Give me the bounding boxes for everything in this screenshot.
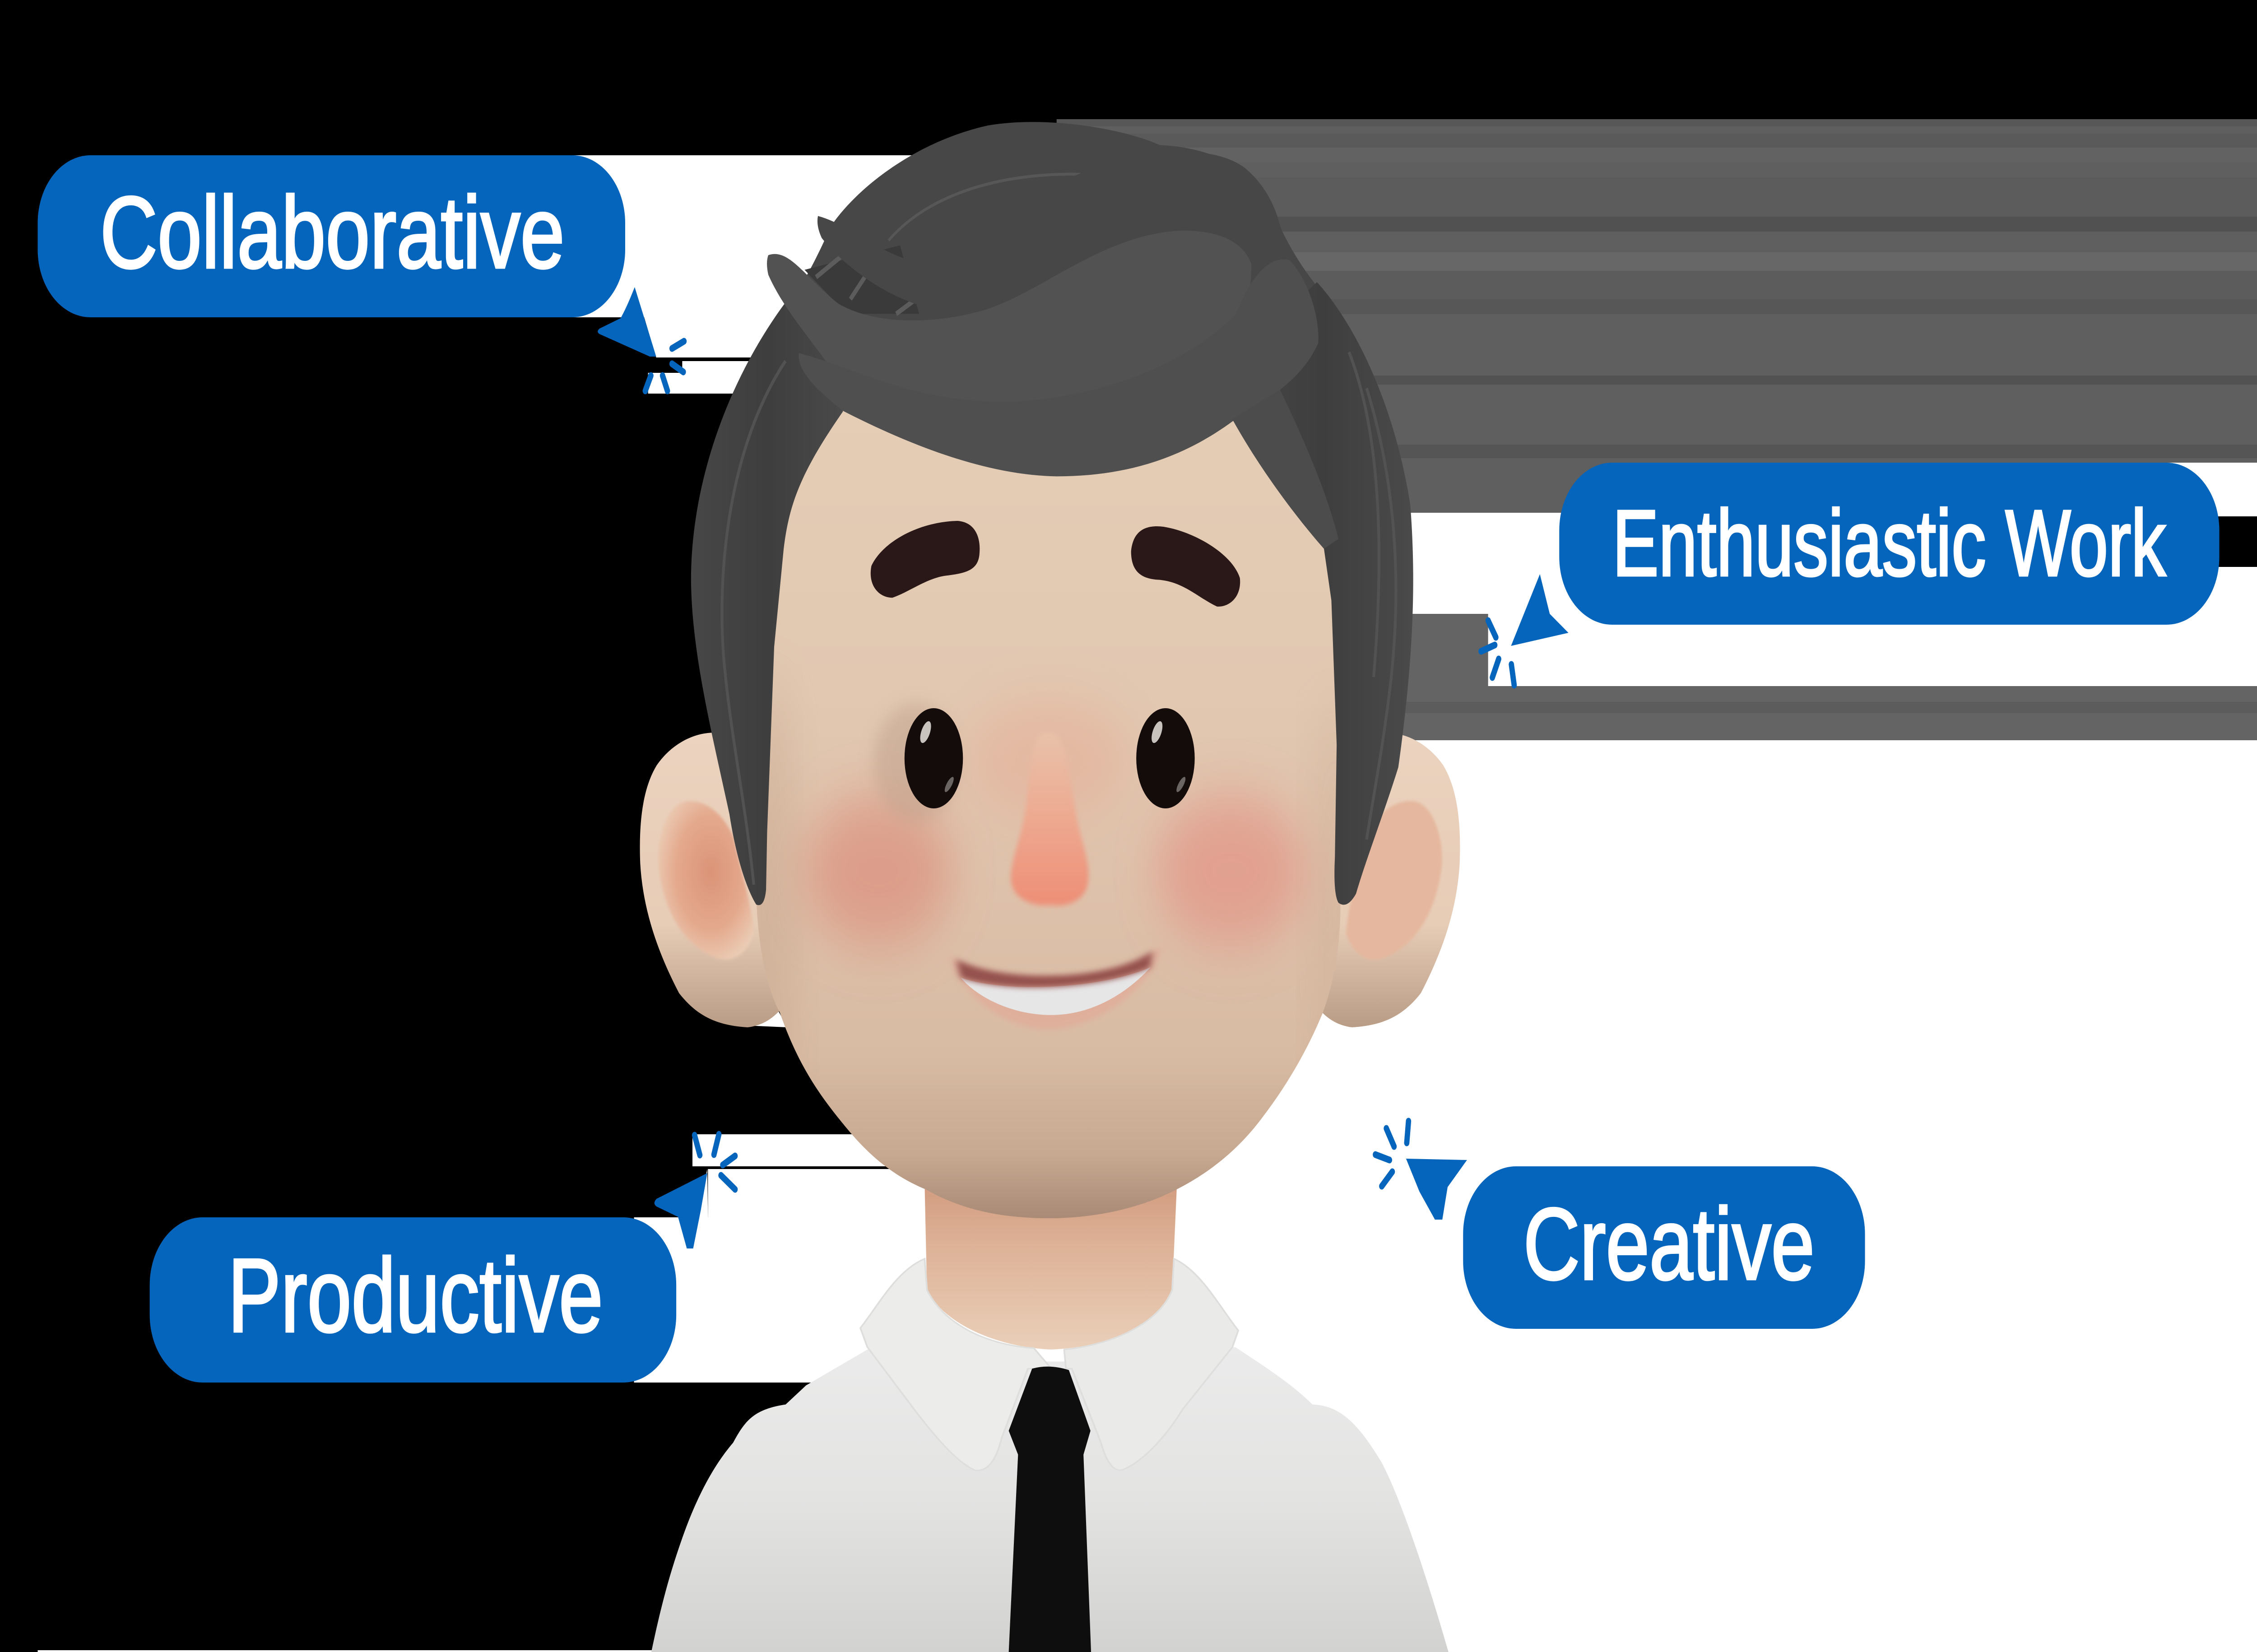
icon: Productive click pointer [655, 1134, 735, 1248]
top hair strands [767, 152, 1338, 549]
hair strand lines [722, 352, 1396, 885]
icon: Enthusiastic Work click pointer [1481, 574, 1569, 685]
hair upper swoosh [817, 152, 1284, 311]
right eye [1136, 708, 1195, 808]
hair right forelock [1232, 390, 1338, 549]
nose [1011, 732, 1088, 905]
hair front band [799, 259, 1319, 476]
necktie [1009, 1367, 1091, 1652]
neck [924, 1185, 1177, 1350]
mouth [949, 946, 1162, 1030]
back hair silhouette [778, 122, 1338, 451]
icon: Collaborative click pointer [598, 287, 684, 391]
right side hair [1233, 282, 1413, 905]
hair main sweep [767, 231, 1251, 446]
icon: Creative click pointer [1375, 1121, 1467, 1220]
right eyebrow [1131, 526, 1240, 607]
shirt body [651, 1347, 1449, 1652]
callout: Productive: Productive [228, 1238, 603, 1354]
callout: Collaborative: Collaborative [100, 176, 565, 289]
callout: Creative: Creative [1523, 1187, 1815, 1301]
callout: Enthusiastic Work: Enthusiastic Work [1612, 491, 2166, 596]
left eye [905, 708, 963, 808]
callout: Collaborative [37, 155, 625, 317]
left eyebrow [871, 521, 980, 598]
right ear [1320, 733, 1460, 1027]
face [757, 411, 1341, 1218]
callout: Enthusiastic Work [1559, 463, 2220, 625]
callout: Creative [1463, 1166, 1865, 1329]
callout: Productive [150, 1217, 676, 1383]
character avatar [640, 122, 1460, 1652]
left side hair [691, 302, 845, 905]
shirt collar [860, 1259, 1238, 1471]
left ear [640, 733, 780, 1027]
